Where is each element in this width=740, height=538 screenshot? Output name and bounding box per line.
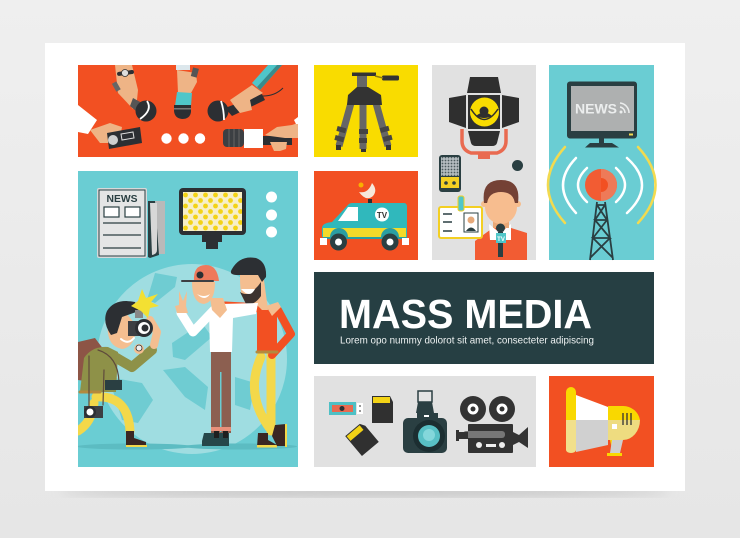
panel: microphones xyxy=(78,65,298,157)
panel: TV van xyxy=(314,171,418,260)
panel: reporter xyxy=(432,65,536,260)
film camera xyxy=(456,396,528,453)
hand with microphone top left xyxy=(112,65,156,122)
camera flash burst xyxy=(131,289,159,318)
tripod legs xyxy=(334,87,393,152)
SD card upright xyxy=(372,396,393,423)
LED panel xyxy=(179,188,246,249)
reporter figure xyxy=(475,180,527,260)
press badge xyxy=(439,196,482,238)
panel: megaphone xyxy=(549,376,654,467)
camera xyxy=(403,391,447,453)
TV label: TV xyxy=(377,211,388,220)
hand with recorder xyxy=(78,105,142,149)
panel: main illustration xyxy=(77,171,298,467)
globe xyxy=(77,264,297,454)
panel: gear xyxy=(314,376,536,467)
photographer xyxy=(78,289,159,447)
reporter figure: TV xyxy=(497,237,505,243)
NEWS label: NEWS xyxy=(575,102,617,116)
hand with microphone top right xyxy=(208,65,283,122)
heading: MASS MEDIA xyxy=(339,291,592,337)
panel: news tower xyxy=(548,65,656,260)
man with beard xyxy=(225,257,291,448)
hand with microphone bottom right xyxy=(223,117,298,151)
man in white shirt xyxy=(175,265,258,446)
megaphone xyxy=(566,387,640,456)
TV monitor xyxy=(567,82,637,148)
studio light xyxy=(449,77,519,159)
panel: tripod xyxy=(314,65,418,157)
hand with microphone top middle xyxy=(174,65,199,119)
satellite dish xyxy=(358,182,375,208)
panel: title xyxy=(314,272,654,364)
SD card tilted xyxy=(345,422,379,456)
dark dot xyxy=(512,160,523,171)
white dots xyxy=(266,192,277,238)
tower xyxy=(585,169,617,260)
signal waves xyxy=(548,147,656,223)
portable recorder xyxy=(439,155,461,192)
white card xyxy=(45,43,685,491)
tripod head xyxy=(352,72,399,88)
USB drive xyxy=(329,402,363,415)
newspaper heading: NEWS xyxy=(106,194,138,205)
newspaper xyxy=(97,188,165,258)
white dots xyxy=(161,133,205,144)
subtitle: Lorem opo nummy dolorot sit amet, consecteter adipiscing xyxy=(340,334,594,346)
